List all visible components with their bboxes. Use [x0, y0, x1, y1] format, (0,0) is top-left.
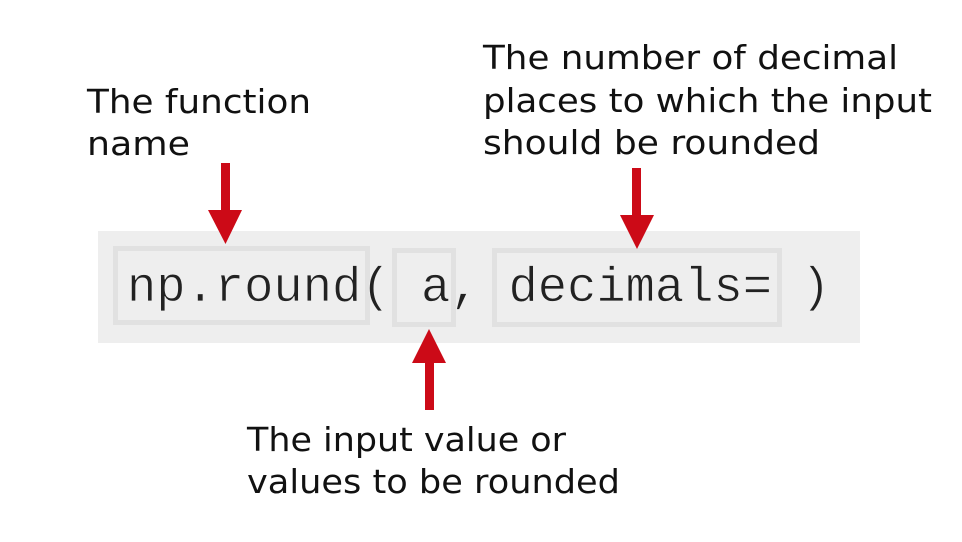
label: function name: [86, 82, 311, 163]
code text: np.round syntax: [127, 260, 830, 316]
label: decimals description: places to which the input: [483, 81, 932, 120]
label: function name: name: [87, 124, 190, 163]
highlight box: decimals: [494, 250, 780, 324]
label: function name: The function: [86, 82, 311, 121]
highlight box: input a: [394, 250, 454, 324]
highlight box: function name: [116, 248, 368, 322]
label: input description: The input value or: [246, 420, 566, 459]
code text: np.round syntax: decimals=: [508, 260, 772, 316]
label: input description: [246, 420, 620, 501]
arrow: function name: [208, 163, 242, 244]
label: decimals description: should be rounded: [483, 123, 820, 162]
arrow: input: [412, 329, 446, 410]
label: decimals description: The number of decimal: [482, 38, 898, 77]
label: decimals description: [482, 38, 932, 162]
label: input description: values to be rounded: [247, 462, 620, 501]
code text: np.round syntax: a,: [421, 260, 480, 316]
code text: np.round syntax: np.round(: [127, 260, 391, 316]
arrow: decimals: [620, 168, 654, 249]
code text: np.round syntax: ): [801, 260, 830, 316]
panel: code background: [98, 231, 860, 343]
